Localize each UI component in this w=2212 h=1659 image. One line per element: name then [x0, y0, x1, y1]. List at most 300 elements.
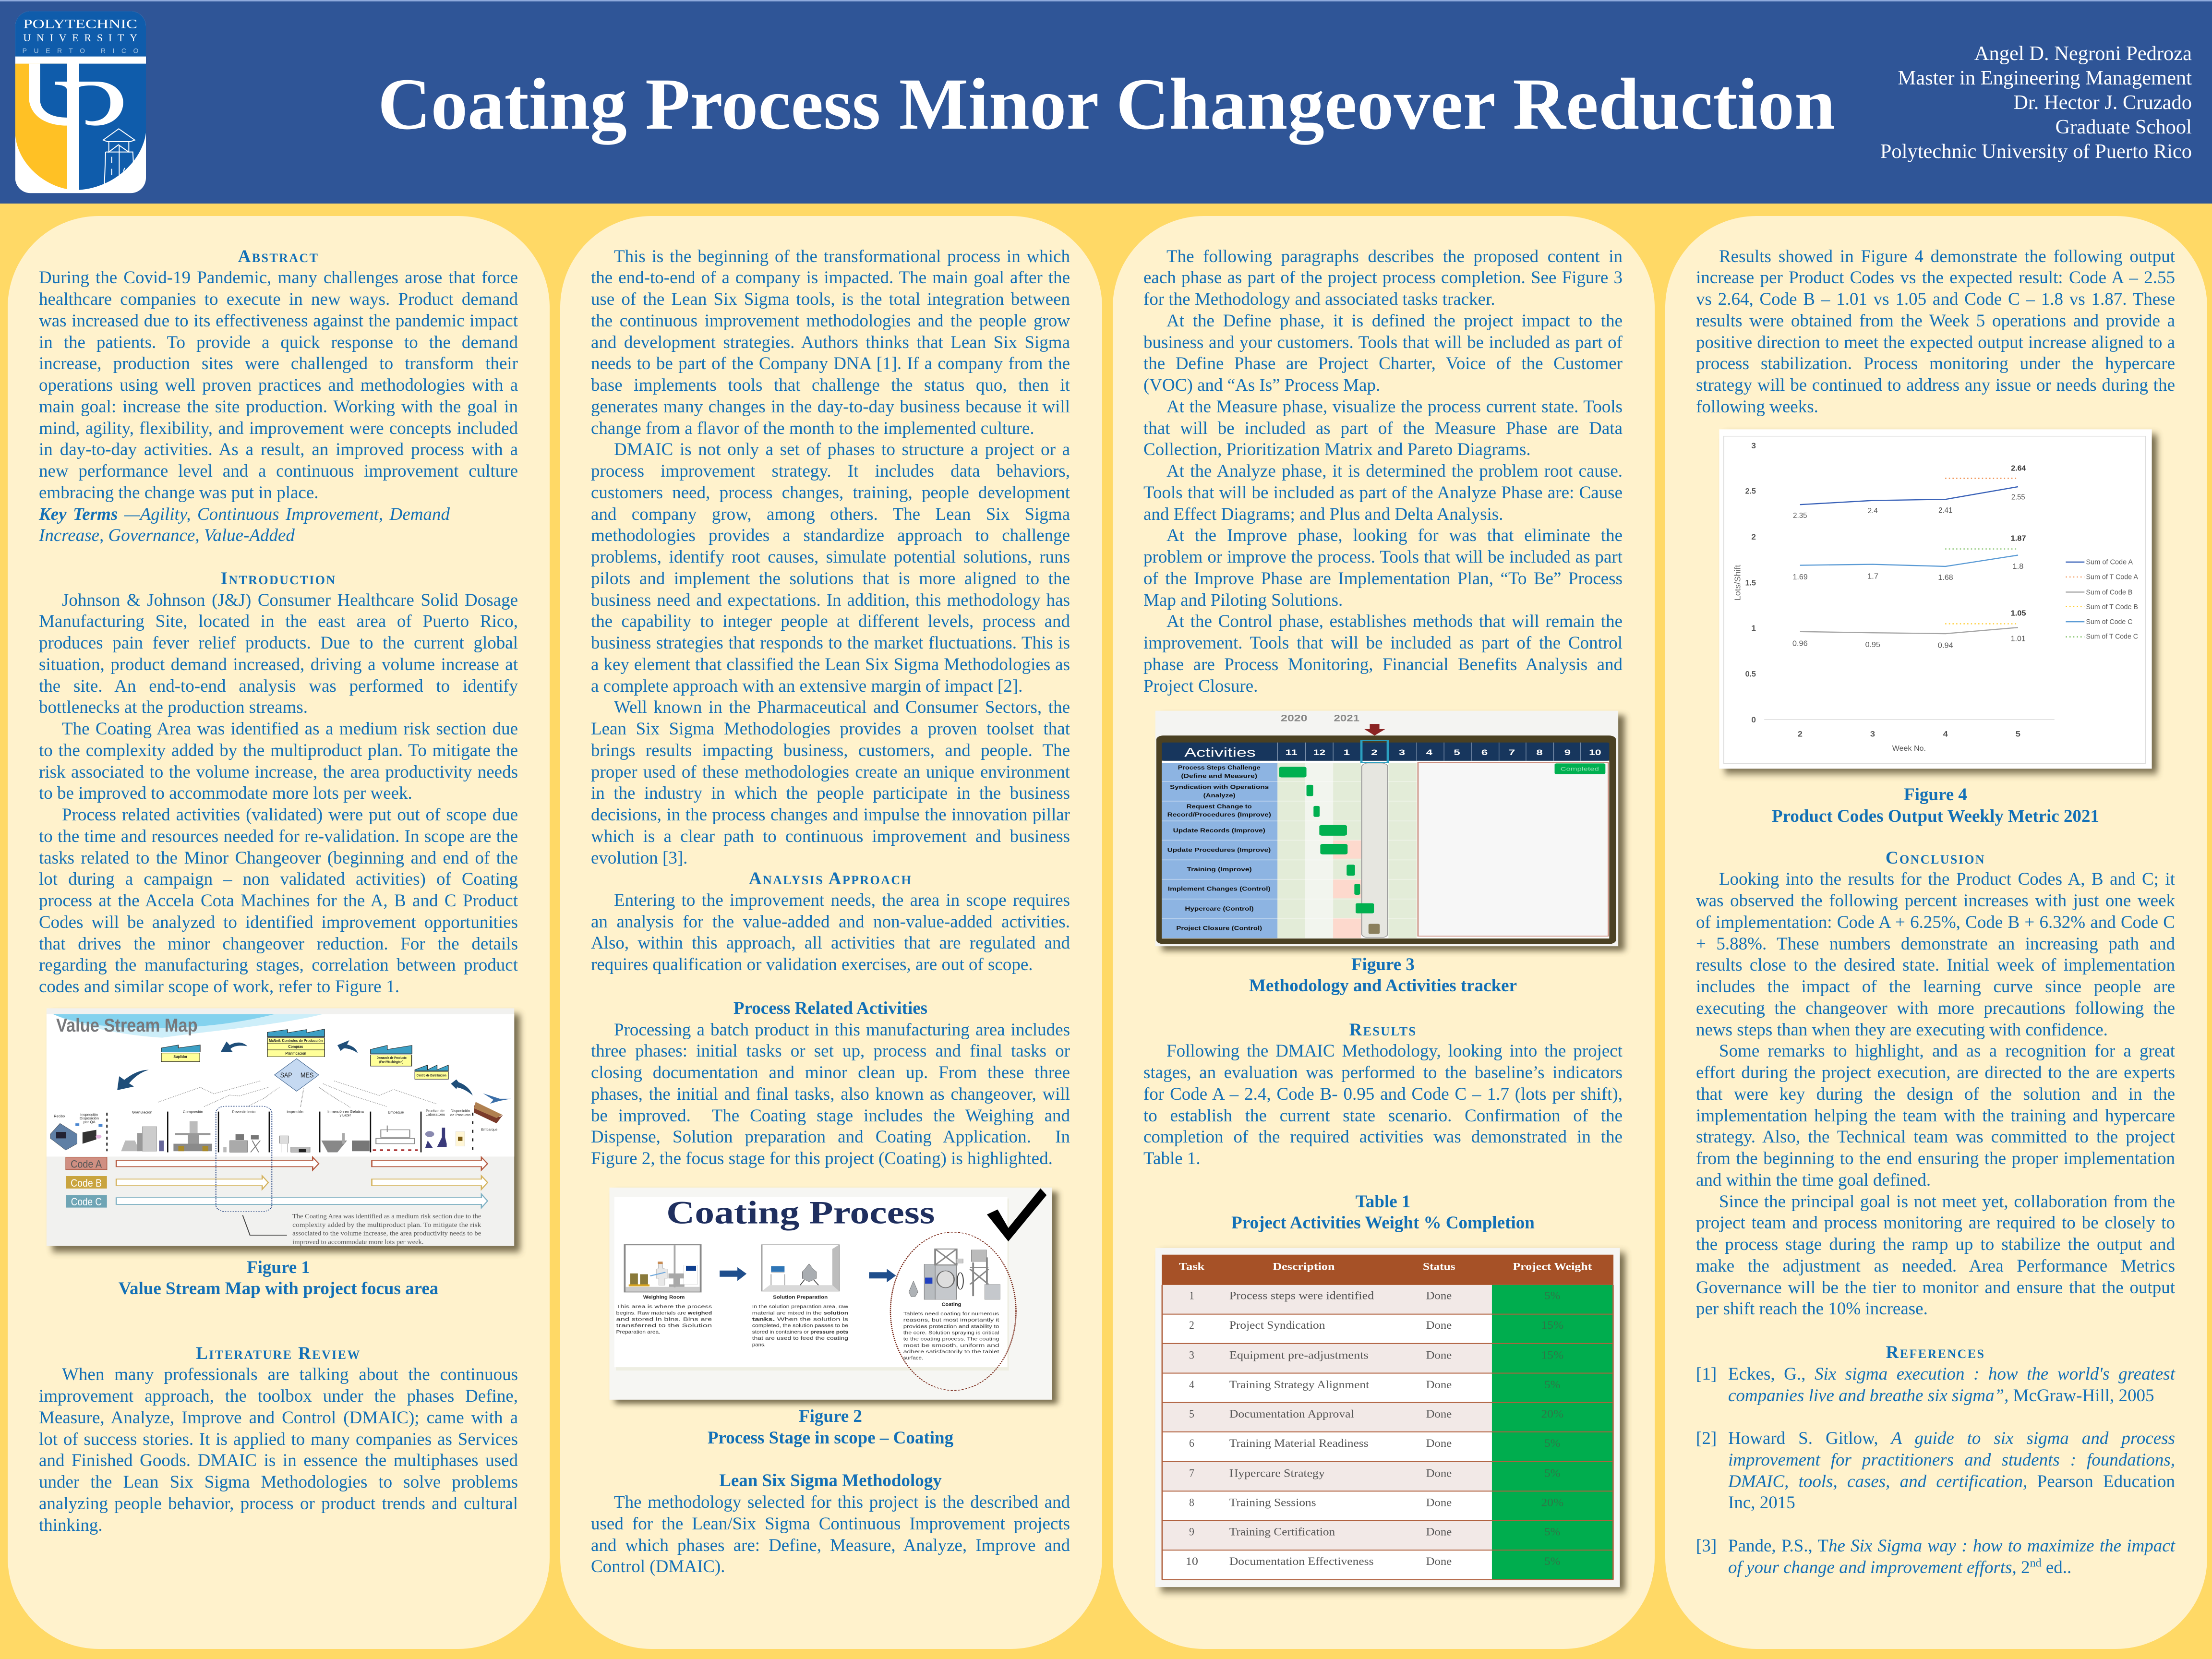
literature review section: lot of success stories. It is applied to many companies as Services [39, 1430, 518, 1449]
column 3 phase descriptions: Collection, Prioritization Matrix and Pareto Diagrams. [1143, 440, 1531, 459]
figure 4: line chart [1699, 422, 2179, 782]
introduction section: tasks related to the Minor Changeover (beginning and end of the [39, 848, 518, 868]
chart legend: Sum of Code A [2086, 558, 2133, 566]
column 4 results text: strategy will be continued to address any issue or needs during the [1696, 375, 2175, 395]
process related activities section [591, 998, 1070, 1168]
lean six sigma methodology section: used for the Lean/Six Sigma Continuous Improvement projects [591, 1514, 1070, 1534]
results section [1143, 1020, 1623, 1170]
column 3 phase descriptions: business and your customers. Tools that will be included as part of [1143, 333, 1623, 352]
panel: column 3 [1113, 216, 1655, 1649]
introduction section: to the time and resources needed for re-validation. In scope are the [39, 827, 518, 846]
activity rows: Syndication with Operations [1170, 784, 1269, 790]
completed legend: Completed [1561, 766, 1599, 772]
literature review section: analyzing people behavior, process or product trends and cultural [39, 1494, 518, 1514]
icon: Polytechnic University logo [15, 11, 146, 193]
figure 1: value stream map: McNeil: Controles de Producción [269, 1038, 323, 1043]
data labels: 1.87 [2011, 534, 2026, 542]
table 1: project activities: Status [1423, 1261, 1455, 1273]
introduction section: regarding the manufacturing stages, correlation between product [39, 955, 518, 975]
figure 1 callout text: improved to accommodate more lots per week. [292, 1238, 423, 1246]
analysis approach section [591, 869, 1070, 974]
task rows: Training Strategy Alignment [1229, 1379, 1370, 1391]
introduction section: Johnson & Johnson (J&J) Consumer Healthcare Solid Dosage [62, 590, 518, 610]
task rows: Done [1426, 1290, 1452, 1302]
column 4 results text: vs 2.64, Code B – 1.01 vs 1.05 and Code C – 1.8 vs 1.87. These [1696, 289, 2175, 309]
task rows: Done [1426, 1319, 1452, 1331]
column 2 opening text: change from a flavor of the month to the implemented culture. [591, 419, 1034, 438]
references section: of your change and improvement efforts, 2nd ed.. [1728, 1557, 2071, 1577]
task rows: Training Material Readiness [1229, 1437, 1369, 1449]
weighing room illustration [625, 1245, 701, 1292]
results section: Table 1. [1143, 1149, 1201, 1168]
project weight column: 5% [1544, 1437, 1561, 1449]
literature review section: and Finished Goods. DMAIC is in essence the multiphases used [39, 1451, 518, 1470]
task rows: Done [1426, 1467, 1452, 1479]
figure 4 caption: Figure 4 [1904, 785, 1967, 805]
figure 2 caption: Figure 2 [799, 1407, 862, 1426]
data labels: 2.35 [1793, 511, 1807, 519]
task rows: 2 [1189, 1319, 1194, 1331]
task rows: 3 [1189, 1349, 1194, 1361]
column 3 phase descriptions: the Define Phase are Project Charter, Voice of the Customer [1143, 354, 1623, 373]
figure 1: value stream map: Value Stream Map [56, 1015, 198, 1036]
introduction section: to the complexity added by the multiproduct plan. To mitigate the [39, 741, 518, 760]
abstract section: in the patients. To provide a quick response to the demand [39, 333, 518, 352]
literature review section: When many professionals are talking about the continuous [62, 1365, 518, 1384]
data labels: 1.8 [2012, 563, 2023, 571]
literature review section: improvement approach, the toolbox under the phases Define, [39, 1386, 518, 1406]
figure 1: value stream map: y Lazer [340, 1113, 351, 1118]
tracker header row: 3 [1399, 748, 1405, 757]
results section: for Code A – 2.4, Code B- 0.95 and Code C – 1.7 (lots per shift), [1143, 1084, 1623, 1104]
column 2 opening text: business strategies that responds to the market fluctuations. This is [591, 633, 1070, 653]
stage captions and descriptions: Weighing Room [643, 1294, 685, 1300]
figure 3: activities tracker [1138, 696, 1642, 984]
task rows: 6 [1189, 1437, 1194, 1449]
references section [1696, 1342, 2175, 1578]
data labels: 1.01 [2011, 635, 2026, 643]
panel: column 4 [1665, 216, 2207, 1649]
task rows: 7 [1189, 1467, 1194, 1479]
conclusion section: that were key during the design of the solution and in the [1696, 1084, 2175, 1104]
task rows: Equipment pre-adjustments [1229, 1349, 1369, 1361]
figure 1: value stream map: (Fort Washington) [379, 1060, 403, 1064]
column 2 opening text: business need and expectations. In addition, this methodology has [591, 590, 1070, 610]
abstract section: healthcare companies to execute in new ways. Product demand [39, 289, 518, 309]
column 2 opening text: in the industry in which the people participate in the business [591, 783, 1070, 803]
task rows: 9 [1189, 1526, 1194, 1538]
column 2 opening text: process improvement strategy. It includes data behaviors, [591, 461, 1070, 481]
introduction section: lot during a campaign – non validated activities) of Coating [39, 869, 518, 889]
figure 1: value stream map: Planificación [285, 1051, 306, 1056]
abstract section [38, 247, 518, 545]
x axis labels [1798, 730, 2020, 752]
task rows: Project Syndication [1229, 1319, 1325, 1331]
introduction section: Introduction [220, 569, 337, 589]
process related activities section: Processing a batch product in this manufacturing area includes [614, 1020, 1070, 1040]
introduction section: process at the Accela Cota Machines for the A, B and C Product [39, 891, 518, 911]
table 1: project activities: Task [1179, 1261, 1205, 1273]
figure 2: coating process [610, 1188, 1062, 1408]
stage captions and descriptions: This area is where the process [616, 1304, 712, 1310]
task rows: Documentation Approval [1229, 1408, 1354, 1420]
results section: Results [1349, 1020, 1417, 1040]
figure 1: value stream map: Revestimiento [232, 1110, 255, 1114]
x axis labels: 2 [1798, 730, 1803, 739]
y axis labels: 2.5 [1745, 487, 1756, 496]
stage captions and descriptions: reasons, but most importantly it [903, 1317, 999, 1323]
data labels: 1.7 [1867, 572, 1878, 580]
conclusion section: Looking into the results for the Product Codes A, B and C; it [1719, 869, 2175, 889]
literature review section: Measure, Analyze, Improve and Control (DMAIC); came with a [39, 1408, 518, 1428]
stage captions and descriptions: to the coating process. The coating [903, 1336, 999, 1342]
introduction section: risk associated to the volume increase, the area productivity needs [39, 762, 518, 782]
figure 1: value stream map: Centro de Distribución [417, 1073, 446, 1077]
conclusion section: strategy. Also, the Technical team was committed to the project [1696, 1127, 2175, 1147]
figure 1: value stream map [46, 1008, 525, 1257]
task rows [1186, 1290, 1452, 1567]
column 2 opening text: evolution [3]. [591, 848, 687, 868]
data labels [1792, 464, 2026, 649]
x axis labels: Week No. [1892, 744, 1926, 752]
tracker header row: Activities [1184, 745, 1256, 760]
project weight column: 5% [1544, 1467, 1561, 1479]
activity rows: Request Change to [1187, 804, 1252, 810]
column 2 opening text [591, 247, 1070, 868]
y axis labels: 3 [1751, 442, 1756, 450]
code labels and flow arrows [66, 1157, 488, 1208]
task rows: Done [1426, 1555, 1452, 1567]
figure 1 callout text [292, 1213, 481, 1246]
stage captions and descriptions: surface. [903, 1355, 923, 1361]
task rows: 1 [1189, 1290, 1194, 1302]
figure 1: value stream map: Empaque [388, 1110, 404, 1115]
figure 4 caption: Product Codes Output Weekly Metric 2021 [1772, 806, 2099, 826]
conclusion section: project team and process monitoring are required to be closely to [1696, 1213, 2175, 1233]
task rows: 4 [1189, 1379, 1194, 1391]
analysis approach section: Also, within this approach, all activities that are regulated and [591, 933, 1070, 953]
process related activities section: closing documentation and minor clean up. From these three [591, 1063, 1070, 1082]
table 1: project activities: Description [1273, 1261, 1335, 1273]
tracker header row: 2 [1371, 748, 1378, 757]
literature review section: Literature Review [196, 1343, 361, 1363]
table 1 caption: Table 1 [1356, 1192, 1410, 1212]
y axis labels: 0 [1751, 716, 1756, 724]
panel: column 2 [560, 216, 1102, 1649]
tracker header row: 11 [1285, 748, 1298, 757]
figure 2 caption [591, 1406, 1070, 1449]
activity rows: (Analyze) [1203, 792, 1236, 799]
task rows: Done [1426, 1437, 1452, 1449]
figure 1: value stream map: de Producto [450, 1113, 470, 1117]
references section: [1] [1696, 1364, 1717, 1384]
activity rows: Process Steps Challenge [1178, 765, 1261, 771]
highlighted dashed ellipse [890, 1232, 1016, 1391]
process related activities section: Figure 2, the focus stage for this project (Coating) is highlighted. [591, 1149, 1053, 1168]
column 3 phase descriptions: each phase as part of the project process completion. See Figure 3 [1143, 268, 1623, 288]
conclusion section: from the beginning to the end ensuring the proper implementation [1696, 1149, 2175, 1168]
project weight column: 5% [1544, 1379, 1561, 1391]
author block: Polytechnic University of Puerto Rico [1880, 140, 2192, 163]
x axis labels: 4 [1943, 730, 1948, 739]
project weight column [1541, 1290, 1563, 1567]
icon: Polytechnic University logo: UNIVERSITY [23, 32, 137, 44]
introduction section: codes and similar scope of work, refer to Figure 1. [39, 977, 399, 997]
tracker header row: 5 [1454, 748, 1460, 757]
activity rows: Hypercare (Control) [1185, 905, 1254, 912]
figure 1: value stream map: Disposición [451, 1109, 470, 1113]
current month arrow [1364, 724, 1385, 735]
introduction section: Process related activities (validated) were put out of scope due [62, 805, 518, 825]
data labels: 2.64 [2011, 464, 2026, 472]
references section: Inc, 2015 [1728, 1493, 1795, 1513]
stage captions and descriptions: and stored in bins. Bins are [616, 1317, 712, 1322]
figure 3 caption: Methodology and Activities tracker [1249, 976, 1517, 996]
task rows: Process steps were identified [1229, 1290, 1374, 1302]
data labels: 2.4 [1868, 506, 1878, 515]
analysis approach section: an analysis for the value-added and non-value-added activities. [591, 912, 1070, 931]
column 2 opening text: a complete approach with an extensive margin of impact [2]. [591, 676, 1022, 696]
introduction section: bottlenecks at the production streams. [39, 697, 308, 717]
icon: Polytechnic University logo: PUERTO RICO [23, 47, 138, 55]
column 4 results text: Results showed in Figure 4 demonstrate the following output [1719, 247, 2175, 266]
references section: [3] [1696, 1536, 1717, 1556]
abstract section: Abstract [238, 247, 319, 266]
figure 1 callout text: associated to the volume increase, the area productivity needs to be [292, 1230, 481, 1237]
figure 1: value stream map: Granulación [132, 1110, 152, 1115]
conclusion section: effort during the project execution, are directed to the are experts [1696, 1063, 2175, 1082]
figure 1: value stream map: por QA [84, 1120, 96, 1124]
data labels: 0.96 [1792, 639, 1808, 648]
column 2 opening text: and development strategies. Authors thinks that Lean Six Sigma [591, 333, 1070, 352]
figure 1: value stream map: Pruebas de [426, 1109, 445, 1113]
data labels: 2.55 [2011, 493, 2025, 501]
stage captions and descriptions [616, 1294, 999, 1361]
activity rows: Implement Changes (Control) [1168, 886, 1271, 892]
figure 3: activities tracker: 2020 [1281, 713, 1308, 723]
task rows: 5 [1189, 1408, 1194, 1420]
project weight column: 15% [1541, 1349, 1563, 1361]
chart legend: Sum of T Code C [2086, 633, 2138, 640]
SAP MES diamond [275, 1058, 319, 1091]
title: Coating Process Minor Changeover Reduction [378, 64, 1835, 145]
task rows: Documentation Effectiveness [1229, 1555, 1374, 1567]
task rows: Hypercare Strategy [1229, 1467, 1325, 1479]
references section: References [1886, 1343, 1985, 1362]
data labels: 1.68 [1938, 574, 1953, 582]
figure 1: value stream map: Impresión [287, 1110, 303, 1114]
literature review section: thinking. [39, 1515, 103, 1535]
references section: Howard S. Gitlow, A guide to six sigma and process [1728, 1429, 2175, 1448]
abstract section: in day-to-day activities. As a result, an improved process with a [39, 440, 518, 459]
code labels and flow arrows: Code C [71, 1196, 102, 1208]
conclusion section: the process stage during the ramp up to stabilize the output and [1696, 1235, 2175, 1254]
data labels: 0.94 [1938, 641, 1953, 649]
data labels: 1.05 [2011, 609, 2026, 617]
column 2 opening text: needs to be part of the Company DNA [1]. If a company from the [591, 354, 1070, 373]
figure 1: value stream map: Compresión [183, 1110, 203, 1114]
column 3 phase descriptions: of the Improve Phase are Implementation Plan, “To Be” Process [1143, 569, 1623, 589]
column 2 opening text: generates many changes in the day-to-day business because it will [591, 397, 1070, 417]
task rows: Done [1426, 1496, 1452, 1509]
column 2 opening text: Lean Six Sigma Methodologies provides a proven toolset that [591, 719, 1070, 739]
conclusion section: executing the changeover with more precautions following the [1696, 998, 2175, 1018]
data labels: 2.41 [1938, 506, 1952, 514]
stage captions and descriptions: begins. Raw materials are weighed [616, 1310, 712, 1316]
y axis title: Lots/Shift [1733, 565, 1743, 601]
tracker header row: 7 [1509, 748, 1515, 757]
figure 1: value stream map: Demanda de Producto [377, 1056, 407, 1060]
tracker header row [1162, 743, 1609, 761]
completed legend [1555, 763, 1605, 774]
activity rows: Update Procedures (Improve) [1167, 847, 1271, 853]
column 3 phase descriptions: At the Define phase, it is defined the project impact to the [1166, 311, 1623, 331]
results section: stages, an evaluation was performed to the baseline’s indicators [1143, 1063, 1623, 1082]
stage captions and descriptions: provides protection and stability to [903, 1324, 999, 1329]
column 3 phase descriptions: At the Control phase, establishes methods that will remain the [1166, 612, 1623, 631]
project weight column: 20% [1541, 1408, 1563, 1420]
abstract section: operations using well proven practices and methodologies with a [39, 375, 518, 395]
stage captions and descriptions: In the solution preparation area, raw [752, 1304, 848, 1310]
conclusion section: Governance will be the tier to monitor and ensure that the output [1696, 1278, 2175, 1298]
introduction section: that drives the minor changeover reduction. For the details [39, 934, 518, 954]
activity rows: Project Closure (Control) [1176, 925, 1262, 931]
stage captions and descriptions: completed, the solution passes to be [752, 1323, 848, 1328]
tracker header row: 4 [1426, 748, 1433, 757]
author block: Angel D. Negroni Pedroza [1974, 42, 2192, 65]
icon: Polytechnic University logo: POLYTECHNIC [23, 17, 137, 31]
y axis labels: 0.5 [1745, 670, 1756, 679]
stage captions and descriptions: Coating [942, 1302, 961, 1307]
process related activities section: Dispense, Solution preparation and Coating Application. In [591, 1127, 1070, 1147]
focus area dotted box [216, 1106, 272, 1212]
x axis labels: 3 [1870, 730, 1875, 739]
chart legend [2066, 558, 2139, 640]
column 3 phase descriptions: Map and Piloting Solutions. [1143, 590, 1343, 610]
column 4 results text: positive direction to meet the expected output increase aligned to a [1696, 333, 2175, 352]
figure 1 callout text: complexity added by the multiproduct plan. To mitigate the risk [292, 1221, 481, 1228]
activity rows [1162, 741, 1608, 938]
figure 1: value stream map: Embarque [481, 1128, 497, 1132]
chart legend: Sum of Code B [2086, 589, 2132, 596]
column 3 phase descriptions [1143, 246, 1623, 697]
column 2 opening text: problems, identify root causes, simulate potential solutions, runs [591, 547, 1070, 567]
references section: Pande, P.S., The Six Sigma way : how to maximize the impact [1728, 1536, 2175, 1556]
column 3 phase descriptions: phase are Process Monitoring, Financial Benefits Analysis and [1143, 655, 1623, 674]
chart legend: Sum of T Code B [2086, 603, 2138, 611]
introduction section: to be improved to accommodate more lots per week. [39, 783, 412, 803]
column 2 opening text: the continuous improvement methodologies and the people grow [591, 311, 1070, 331]
y axis labels: 1.5 [1745, 579, 1756, 588]
lean six sigma methodology section: Lean Six Sigma Methodology [719, 1471, 942, 1491]
process related activities section: be improved. The Coating stage includes the Weighing and [591, 1106, 1070, 1126]
coating machine illustration [909, 1249, 1000, 1299]
icon: check mark [987, 1189, 1046, 1241]
arrows between stages [720, 1267, 896, 1282]
panel: column 1 [8, 216, 550, 1649]
activity rows: Training (Improve) [1187, 866, 1252, 873]
project weight column: 5% [1544, 1555, 1561, 1567]
column 3 phase descriptions: for the Methodology and associated tasks tracker. [1143, 289, 1495, 309]
author block: Master in Engineering Management [1898, 67, 2192, 89]
conclusion section: per shift reach the 10% increase. [1696, 1299, 1928, 1319]
introduction section [39, 569, 518, 997]
column 3 phase descriptions: problem or improve the process. Tools that will be included as part [1143, 547, 1623, 567]
figure 1: value stream map: Suplidor [173, 1055, 188, 1059]
figure 1: value stream map: Inspección [80, 1113, 98, 1117]
solution preparation illustration [762, 1245, 839, 1291]
column 3 phase descriptions: Tools that will be included as part of the Analyze Phase are: Cause [1143, 483, 1623, 503]
references section: [2] [1696, 1429, 1717, 1448]
activity rows: Record/Procedures (Improve) [1167, 811, 1271, 818]
project weight column: 5% [1544, 1526, 1561, 1538]
column 4 results text: increase per Product Codes vs the expected result: Code A – 2.55 [1696, 268, 2175, 288]
y axis labels [1745, 442, 1756, 724]
equipment icons [50, 1094, 511, 1152]
lean six sigma methodology section: Control (DMAIC). [591, 1557, 725, 1576]
author block: Graduate School [2056, 116, 2192, 138]
column 3 phase descriptions: improvement. Tools that will be included as part of the Control [1143, 633, 1623, 653]
data labels: 1.69 [1793, 573, 1808, 581]
task rows: 10 [1186, 1555, 1198, 1567]
stage captions and descriptions: stored in containers or pressure pots [752, 1329, 848, 1335]
activity rows: Update Records (Improve) [1173, 827, 1265, 834]
task rows: Done [1426, 1379, 1452, 1391]
task rows: Done [1426, 1526, 1452, 1538]
figure 3 caption: Figure 3 [1351, 954, 1415, 974]
column 2 opening text: DMAIC is not only a set of phases to structure a project or a [614, 440, 1070, 459]
lean six sigma methodology section [591, 1470, 1070, 1578]
figure 1: value stream map: Inmersión en Gelatina [327, 1110, 364, 1114]
tracker header row: 10 [1589, 748, 1601, 757]
abstract section: mind, agility, flexibility, and improvement were concepts included [39, 419, 518, 438]
column 2 opening text: customers need, process changes, training, people development [591, 483, 1070, 503]
data lines [1800, 478, 2018, 634]
column 3 phase descriptions: Project Closure. [1143, 676, 1258, 696]
results section: to establish the current state scenario. Confirmation of the [1143, 1106, 1623, 1126]
abstract section: increase, production sites were challenged to transform their [39, 354, 518, 373]
author block: Dr. Hector J. Cruzado [2013, 91, 2192, 114]
conclusion section: implementation helping the team with the training and hypercare [1696, 1106, 2175, 1126]
tracker header row: 6 [1481, 748, 1488, 757]
task rows: Training Sessions [1229, 1496, 1316, 1509]
conclusion section: includes the impact of the learning curve since people are [1696, 977, 2175, 997]
figure 4 caption [1696, 784, 2175, 828]
code labels and flow arrows: Code B [71, 1177, 102, 1189]
abstract section: During the Covid-19 Pandemic, many challenges arose that force [39, 268, 518, 288]
analysis approach section: Entering to the improvement needs, the area in scope requires [614, 890, 1070, 910]
table 1 caption: Project Activities Weight % Completion [1231, 1213, 1535, 1233]
header band [0, 0, 2212, 204]
references section: DMAIC, tools, cases, and certification, Pearson Education [1728, 1472, 2175, 1491]
figure 1: value stream map: Recibo [54, 1114, 65, 1118]
conclusion section: Since the principal goal is not meet yet, collaboration from the [1719, 1192, 2175, 1212]
stage captions and descriptions: pans. [752, 1342, 766, 1347]
x axis labels: 5 [2016, 730, 2020, 739]
figure 1 caption [119, 1258, 438, 1298]
column 3 phase descriptions: and Effect Diagrams; and Plus and Delta Analysis. [1143, 505, 1503, 524]
data labels: 0.95 [1865, 640, 1880, 649]
introduction section: Codes will be analyzed to identified improvement opportunities [39, 913, 518, 932]
introduction section: produces pain fever relief products. Due to the current global [39, 633, 518, 653]
conclusion section [1696, 848, 2175, 1320]
column 3 phase descriptions: that will be included as part of the Measure Phase are Data [1143, 419, 1623, 438]
column 2 opening text: methodologies provides a standardize approach to challenge [591, 526, 1070, 545]
stage captions and descriptions: the core. Solution spraying is critical [903, 1330, 999, 1335]
figure 2 caption: Process Stage in scope – Coating [708, 1428, 953, 1448]
conclusion section: Conclusion [1886, 848, 1985, 868]
column 3 phase descriptions: (VOC) and “As Is” Process Map. [1143, 375, 1380, 395]
